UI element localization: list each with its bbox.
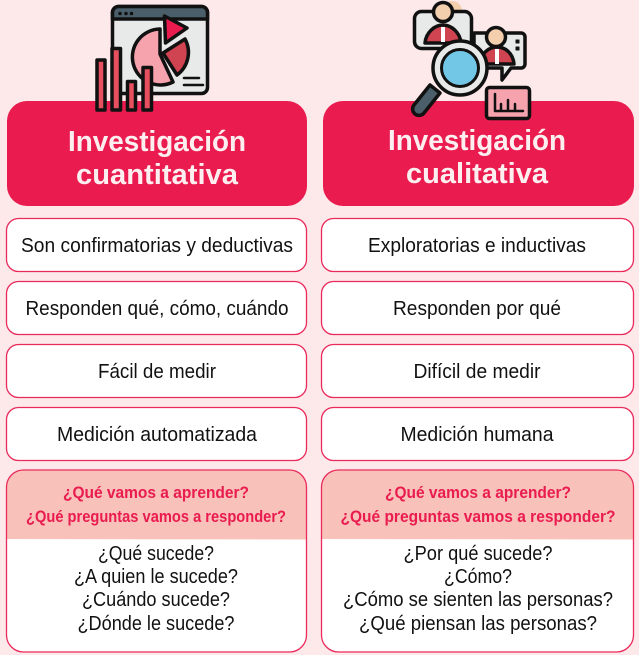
icon: dashboard with pie chart and bars	[97, 6, 208, 110]
row: medición automatizada	[6, 408, 306, 460]
row: son confirmatorias y deductivas	[6, 218, 306, 272]
panel: preguntas cualitativa: ¿Qué preguntas vamos a responder?	[340, 508, 616, 526]
header: investigación cualitativa: Investigación	[388, 125, 566, 157]
panel: preguntas cuantitativa: ¿A quien le sucede?	[74, 566, 238, 588]
panel: preguntas cuantitativa	[6, 470, 306, 652]
header: investigación cuantitativa: cuantitativa	[76, 159, 239, 191]
row: difícil de medir: Difícil de medir	[414, 361, 541, 383]
panel: preguntas cuantitativa: ¿Qué vamos a aprender?	[63, 484, 249, 502]
row: fácil de medir: Fácil de medir	[98, 361, 216, 383]
panel: preguntas cuantitativa: ¿Qué sucede?	[98, 543, 214, 565]
header: investigación cualitativa	[323, 101, 634, 206]
row: medición automatizada: Medición automatizada	[57, 424, 258, 446]
row: responden qué, cómo, cuándo: Responden qué, cómo, cuándo	[26, 298, 288, 320]
row: medición humana: Medición humana	[400, 424, 554, 446]
row: son confirmatorias y deductivas: Son confirmatorias y deductivas	[21, 235, 293, 257]
panel: preguntas cualitativa: ¿Qué vamos a aprender?	[385, 484, 571, 502]
panel: preguntas cualitativa: ¿Qué piensan las personas?	[359, 613, 597, 635]
header: investigación cuantitativa: Investigación	[68, 126, 246, 158]
row: responden por qué	[322, 282, 634, 334]
row: exploratorias e inductivas: Exploratorias e inductivas	[368, 235, 586, 257]
row: exploratorias e inductivas	[322, 218, 634, 272]
panel: preguntas cualitativa	[322, 470, 634, 652]
header: investigación cualitativa: cualitativa	[406, 158, 549, 190]
icon: people under magnifying glass	[413, 1, 530, 118]
row: responden por qué: Responden por qué	[393, 298, 561, 320]
panel: preguntas cualitativa: ¿Por qué sucede?	[404, 543, 552, 565]
header: investigación cuantitativa	[7, 101, 307, 206]
panel: preguntas cuantitativa: ¿Dónde le sucede?	[78, 613, 234, 635]
panel: preguntas cualitativa: ¿Cómo se sienten las personas?	[343, 589, 613, 611]
panel: preguntas cuantitativa: ¿Cuándo sucede?	[82, 589, 230, 611]
row: medición humana	[322, 408, 634, 460]
row: difícil de medir	[322, 344, 634, 398]
row: responden qué, cómo, cuándo	[6, 282, 306, 334]
panel: preguntas cuantitativa: ¿Qué preguntas vamos a responder?	[26, 508, 286, 526]
panel: preguntas cualitativa: ¿Cómo?	[444, 566, 512, 588]
row: fácil de medir	[6, 344, 306, 398]
